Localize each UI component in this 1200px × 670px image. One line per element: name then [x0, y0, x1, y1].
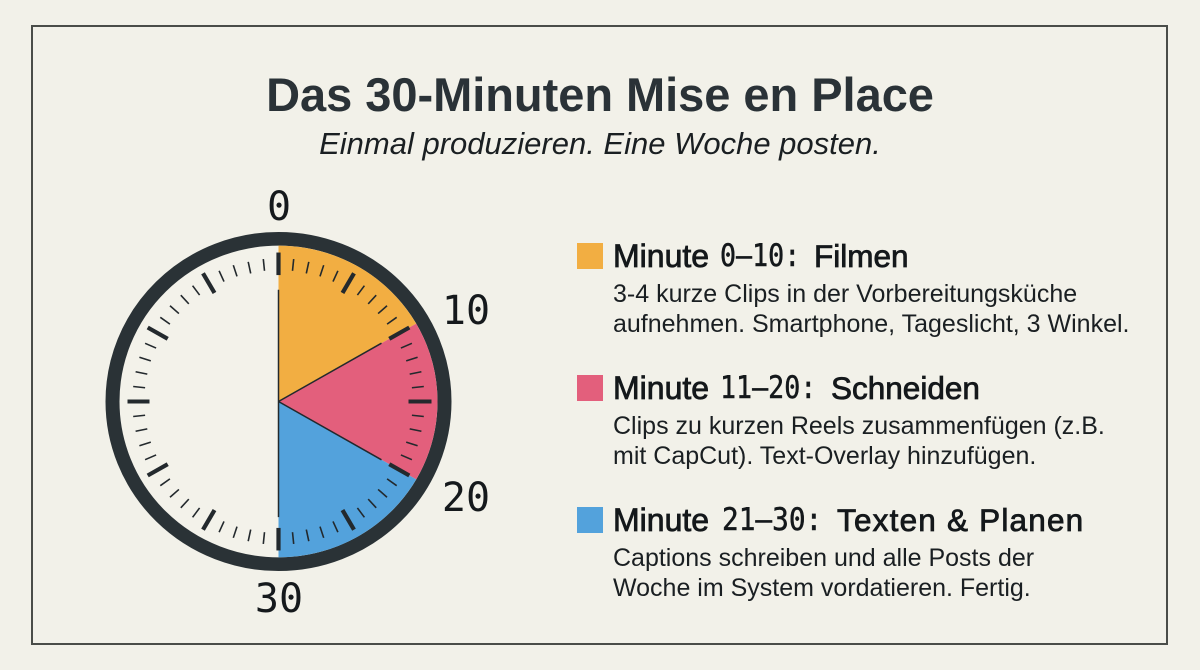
legend text: Texten und Planen: Captions schreiben und alle Posts der — [613, 544, 1034, 572]
legend heading: Schneiden: 11–20: — [720, 370, 816, 406]
minor ticks — [133, 259, 424, 544]
clock face — [112, 239, 444, 564]
title: Das 30-Minuten Mise en Place — [266, 68, 934, 121]
legend heading: Texten und Planen: Minute — [613, 502, 709, 538]
major ticks — [128, 253, 432, 550]
minute labels: 20 — [442, 475, 490, 521]
legend swatch: blue — [577, 507, 603, 533]
dial background — [112, 239, 444, 564]
legend heading: Filmen: Minute — [613, 238, 709, 274]
subtitle: Einmal produzieren. Eine Woche posten. — [319, 126, 881, 161]
legend text: Texten und Planen: Woche im System vordatieren. Fertig. — [613, 574, 1031, 602]
minute labels: 10 — [442, 288, 490, 334]
legend heading: Filmen: 0–10: — [720, 238, 800, 274]
legend text: Filmen: 3-4 kurze Clips in der Vorbereitungsküche — [613, 280, 1077, 308]
minute labels: 0 — [267, 184, 291, 230]
minute labels — [255, 184, 490, 622]
legend text: Texten und Planen — [613, 544, 1034, 602]
segment divider lines — [278, 290, 382, 517]
legend heading: Filmen — [613, 238, 909, 274]
legend text: Filmen: aufnehmen. Smartphone, Tageslicht, 3 Winkel. — [613, 310, 1130, 338]
legend item: Texten und Planen — [577, 502, 1084, 602]
segment: Schneiden pink — [278, 324, 438, 479]
legend heading: Texten und Planen: 21–30: — [722, 502, 822, 538]
legend heading: Texten und Planen — [613, 502, 1084, 538]
legend item: Schneiden — [577, 370, 1105, 470]
legend heading: Filmen: Filmen — [814, 238, 909, 274]
legend text: Schneiden: Clips zu kurzen Reels zusammenfügen (z.B. — [613, 412, 1105, 440]
legend heading: Schneiden: Schneiden — [831, 370, 980, 406]
legend heading: Schneiden — [613, 370, 980, 406]
legend swatch: pink — [577, 375, 603, 401]
legend swatch: orange — [577, 243, 603, 269]
segment: Filmen orange — [278, 246, 416, 402]
legend text: Schneiden: mit CapCut). Text-Overlay hinzufügen. — [613, 442, 1036, 470]
legend text: Schneiden — [613, 412, 1105, 470]
legend text: Filmen — [613, 280, 1130, 338]
legend item: Filmen — [577, 238, 1130, 338]
legend heading: Schneiden: Minute — [613, 370, 709, 406]
segment: Texten blue — [278, 402, 416, 557]
legend heading: Texten und Planen: Texten & Planen — [837, 502, 1084, 538]
minute labels: 30 — [255, 576, 303, 622]
